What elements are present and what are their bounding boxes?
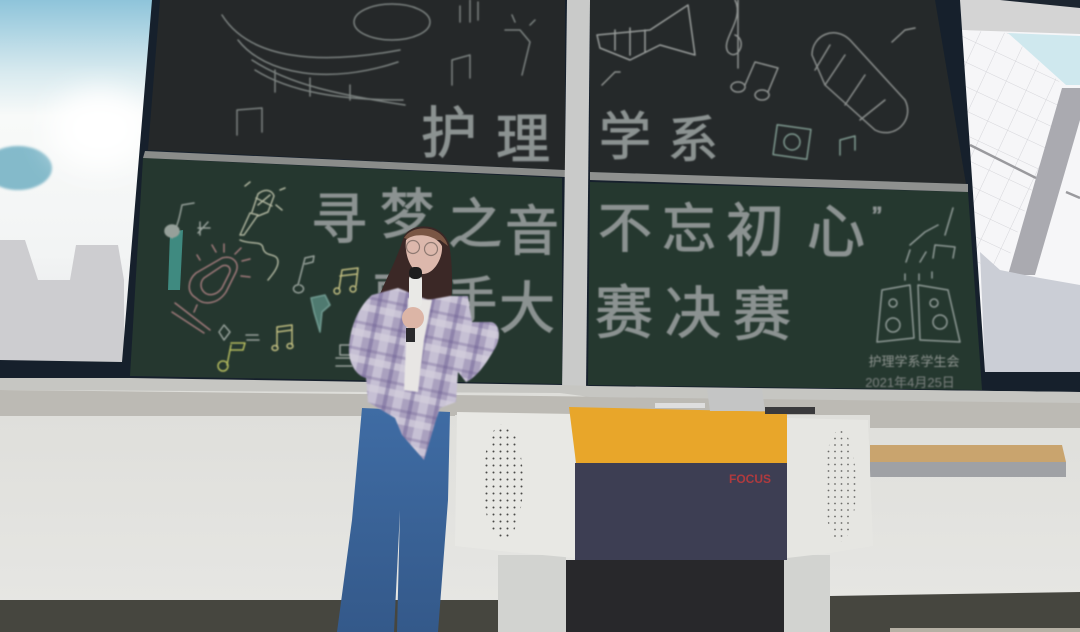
projected top band	[958, 0, 1080, 34]
plaid shirt	[349, 288, 499, 460]
chalk heading: nursing: 护	[421, 102, 477, 165]
panel: blackboard lower left	[130, 158, 562, 384]
glasses	[406, 240, 438, 256]
chalk title line 3: 不	[598, 199, 652, 259]
doodle: small speaker	[773, 125, 855, 159]
chalk title line 1: 梦	[380, 185, 434, 245]
podium left side panel	[455, 412, 575, 558]
chalk title line 1: 之	[448, 195, 502, 255]
doodle: microphone capsule	[812, 33, 908, 133]
white inner shirt	[404, 298, 432, 392]
chalk title line 4	[595, 281, 791, 348]
chalk title line 1: 寻	[311, 188, 367, 251]
monitor on podium	[707, 389, 765, 411]
chalk title line 4: 决	[665, 282, 721, 345]
podium navy front	[575, 463, 787, 560]
doodle: yellow note	[218, 343, 245, 371]
chalk signature: 2021年4月25日	[865, 375, 955, 390]
chalk title line 3: 忘	[662, 200, 716, 260]
hair	[374, 226, 452, 328]
person	[337, 226, 499, 632]
wall	[0, 390, 1080, 605]
doodle: trumpet	[597, 5, 695, 60]
chalk title line 4: 赛	[595, 281, 653, 346]
chalk heading: department	[599, 109, 718, 168]
projected building	[980, 252, 1080, 372]
chalk title line 3: 心	[807, 200, 865, 265]
chalk signature: 护理学系学生会	[868, 354, 960, 369]
chalk title line 2: 大	[499, 277, 555, 340]
panel: blackboard upper right	[590, 0, 966, 184]
board reflections	[168, 230, 183, 290]
chalk title line 3: 初	[726, 199, 784, 264]
shaded wall band under chalk ledge	[0, 390, 1080, 428]
chalk title line 2	[373, 270, 555, 340]
chalk title line 4: 赛	[733, 283, 791, 348]
chalk heading: department: 学	[599, 109, 651, 167]
jeans	[337, 408, 450, 632]
floor strip	[0, 592, 1080, 632]
doodle: small grey notes	[165, 203, 352, 366]
blackboard frame	[0, 0, 1080, 392]
floor edge at lower right	[890, 628, 1080, 632]
chalk title line 3	[598, 199, 882, 265]
doodle: staff lines	[222, 0, 535, 135]
panel: blackboard upper left	[148, 0, 565, 170]
chalk title line 2: 手	[447, 273, 497, 329]
chalk heading: nursing: 理	[496, 110, 550, 170]
chalk title line 3: ”	[872, 201, 882, 232]
brand label: FOCUS	[729, 472, 771, 486]
chalk title line 1: 音	[505, 202, 559, 262]
chalk heading: department: 系	[668, 112, 718, 168]
doodle: treble clef and notes	[602, 0, 915, 100]
podium base	[498, 555, 566, 632]
chalk title line 2: 歌	[373, 270, 427, 330]
doodle: pink microphone	[172, 244, 250, 333]
doodle: speakers and notes on right	[877, 208, 960, 342]
doodle: cream notes	[272, 268, 358, 350]
hand and microphone	[402, 267, 424, 342]
chalk title line 1	[311, 185, 559, 262]
projected grid	[962, 30, 1066, 270]
face	[406, 235, 442, 274]
chalk heading: nursing	[421, 102, 550, 170]
projected sky	[1008, 33, 1080, 85]
panel: blackboard lower right	[588, 182, 982, 390]
chalk signature	[865, 354, 960, 390]
chalk rails and dividers	[0, 0, 1080, 403]
podium orange top	[569, 407, 787, 465]
doodle: teal small microphone	[311, 295, 330, 332]
left projection screen	[0, 0, 160, 362]
podium right side panel	[787, 418, 873, 558]
chalk doodles: music notes and instruments	[165, 0, 960, 371]
projected beam	[1008, 88, 1080, 275]
right projection screen	[955, 0, 1080, 380]
podium	[455, 389, 873, 632]
doodle: small microphone with cable	[240, 182, 285, 280]
desk at right	[870, 445, 1066, 477]
